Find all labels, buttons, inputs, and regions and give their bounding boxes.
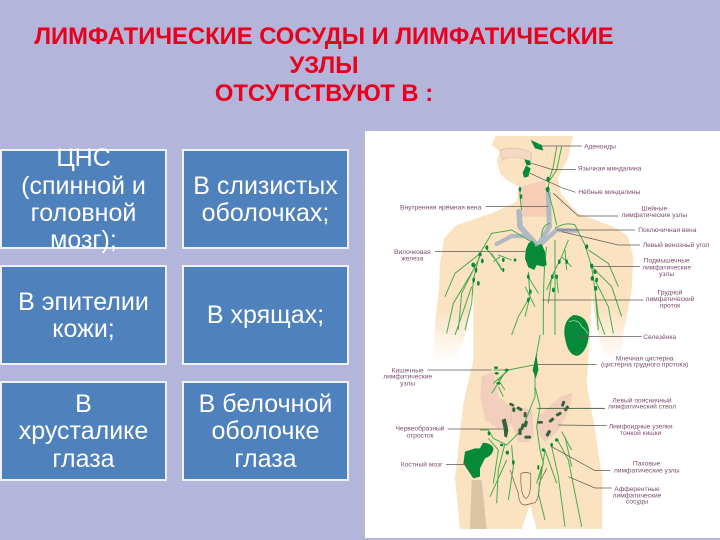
panel: белочная оболочка: оболочке (212, 417, 319, 445)
panel: слизистые оболочки: оболочках; (202, 199, 329, 227)
title: ЛИМФАТИЧЕСКИЕ СОСУДЫ И ЛИМФАТИЧЕСКИЕ (34, 23, 614, 50)
diagram labels: Левый венозный угол (643, 241, 709, 249)
diagram labels: лимфатические (613, 492, 662, 499)
spleen inner line (569, 321, 588, 334)
panel: хрусталик глаза (0, 381, 167, 481)
icon: adenoids (531, 140, 543, 151)
diagram labels (383, 144, 709, 506)
panel: эпителий кожи (0, 265, 167, 365)
diagram labels: Левый поясничный (612, 396, 672, 404)
panel: ЦНС: головной (31, 199, 136, 227)
diagram labels: тонкой кишки (620, 429, 662, 437)
diagram labels: Лимфоидные узелки (609, 424, 673, 431)
icon: tonsils (523, 159, 531, 178)
panel: белочная оболочка: глаза (234, 445, 297, 473)
diagram labels: Костный мозг (401, 460, 443, 468)
diagram labels: Афферентные (614, 486, 660, 493)
panel: ЦНС (0, 149, 167, 249)
diagram labels: Подмышечные (644, 258, 690, 265)
diagram labels: сосуды (626, 499, 648, 506)
panel: lymphatic system diagram (365, 131, 720, 538)
panel: хрящи (182, 265, 349, 365)
diagram labels: лимфатический (646, 295, 695, 303)
diagram labels: Язычная миндалина (578, 165, 642, 172)
diagram labels: лимфатические (642, 264, 691, 271)
diagram labels: Внутренняя ярёмная вена (400, 204, 482, 211)
diagram labels: проток (660, 302, 680, 309)
panel: слизистые оболочки: В слизистых (193, 172, 338, 200)
title: ОТСУТСТВУЮТ В : (215, 80, 433, 107)
icon: thymus (525, 241, 547, 270)
diagram labels: (цистерна грудного протока) (601, 362, 688, 369)
panel: белочная оболочка (182, 381, 349, 481)
leader lines (427, 146, 643, 488)
diagram labels: Грудной (658, 289, 683, 297)
panel: белочная оболочка: В белочной (199, 390, 332, 418)
diagram labels: узлы (400, 380, 415, 387)
diagram labels: Аденоиды (584, 144, 616, 151)
diagram labels: лимфатические узлы (614, 467, 680, 474)
diagram labels: Кишечные (392, 367, 424, 374)
diagram labels: железа (401, 255, 424, 262)
panel: хрусталик глаза: глаза (52, 445, 115, 473)
diagram labels: лимфатический ствол (608, 403, 676, 411)
icon: spleen (564, 315, 589, 356)
panel: эпителий кожи: В эпителии (18, 288, 149, 316)
panel: ЦНС: мозг); (50, 226, 117, 254)
lymphatic vessels (445, 147, 622, 527)
panel: хрусталик глаза: В (75, 390, 92, 418)
diagram labels: Нёбные миндалины (578, 188, 641, 196)
icon: bone marrow (463, 443, 493, 478)
diagram labels: Селезёнка (643, 334, 676, 341)
diagram labels: Червеобразный (395, 425, 445, 433)
panel: хрящи: В хрящах; (207, 301, 324, 329)
diagram labels: отросток (407, 432, 434, 439)
diagram labels: лимфатические (383, 374, 432, 381)
panel: ЦНС: (спинной и (21, 172, 146, 200)
diagram labels: Поключичная вена (638, 227, 697, 234)
body silhouette (433, 136, 633, 529)
veins (497, 193, 577, 245)
panel: ЦНС: ЦНС (56, 144, 111, 172)
diagram labels: лимфатические узлы (622, 212, 687, 219)
panel: слизистые оболочки (182, 149, 349, 249)
panel: эпителий кожи: кожи; (52, 315, 115, 343)
intestinal nodules and appendix (502, 400, 569, 439)
title: УЗЛЫ (289, 52, 359, 78)
diagram labels: Паховые (633, 461, 661, 468)
diagram labels: Шейные (641, 205, 667, 213)
panel: хрусталик глаза: хрусталике (19, 417, 148, 445)
lymph nodes and organs (463, 140, 598, 478)
icon: cisterna (533, 353, 538, 378)
diagram labels: Млечная цистерна (616, 355, 674, 362)
diagram labels: узлы (659, 271, 674, 278)
title (34, 23, 614, 107)
diagram labels: Вилочковая (394, 249, 431, 256)
